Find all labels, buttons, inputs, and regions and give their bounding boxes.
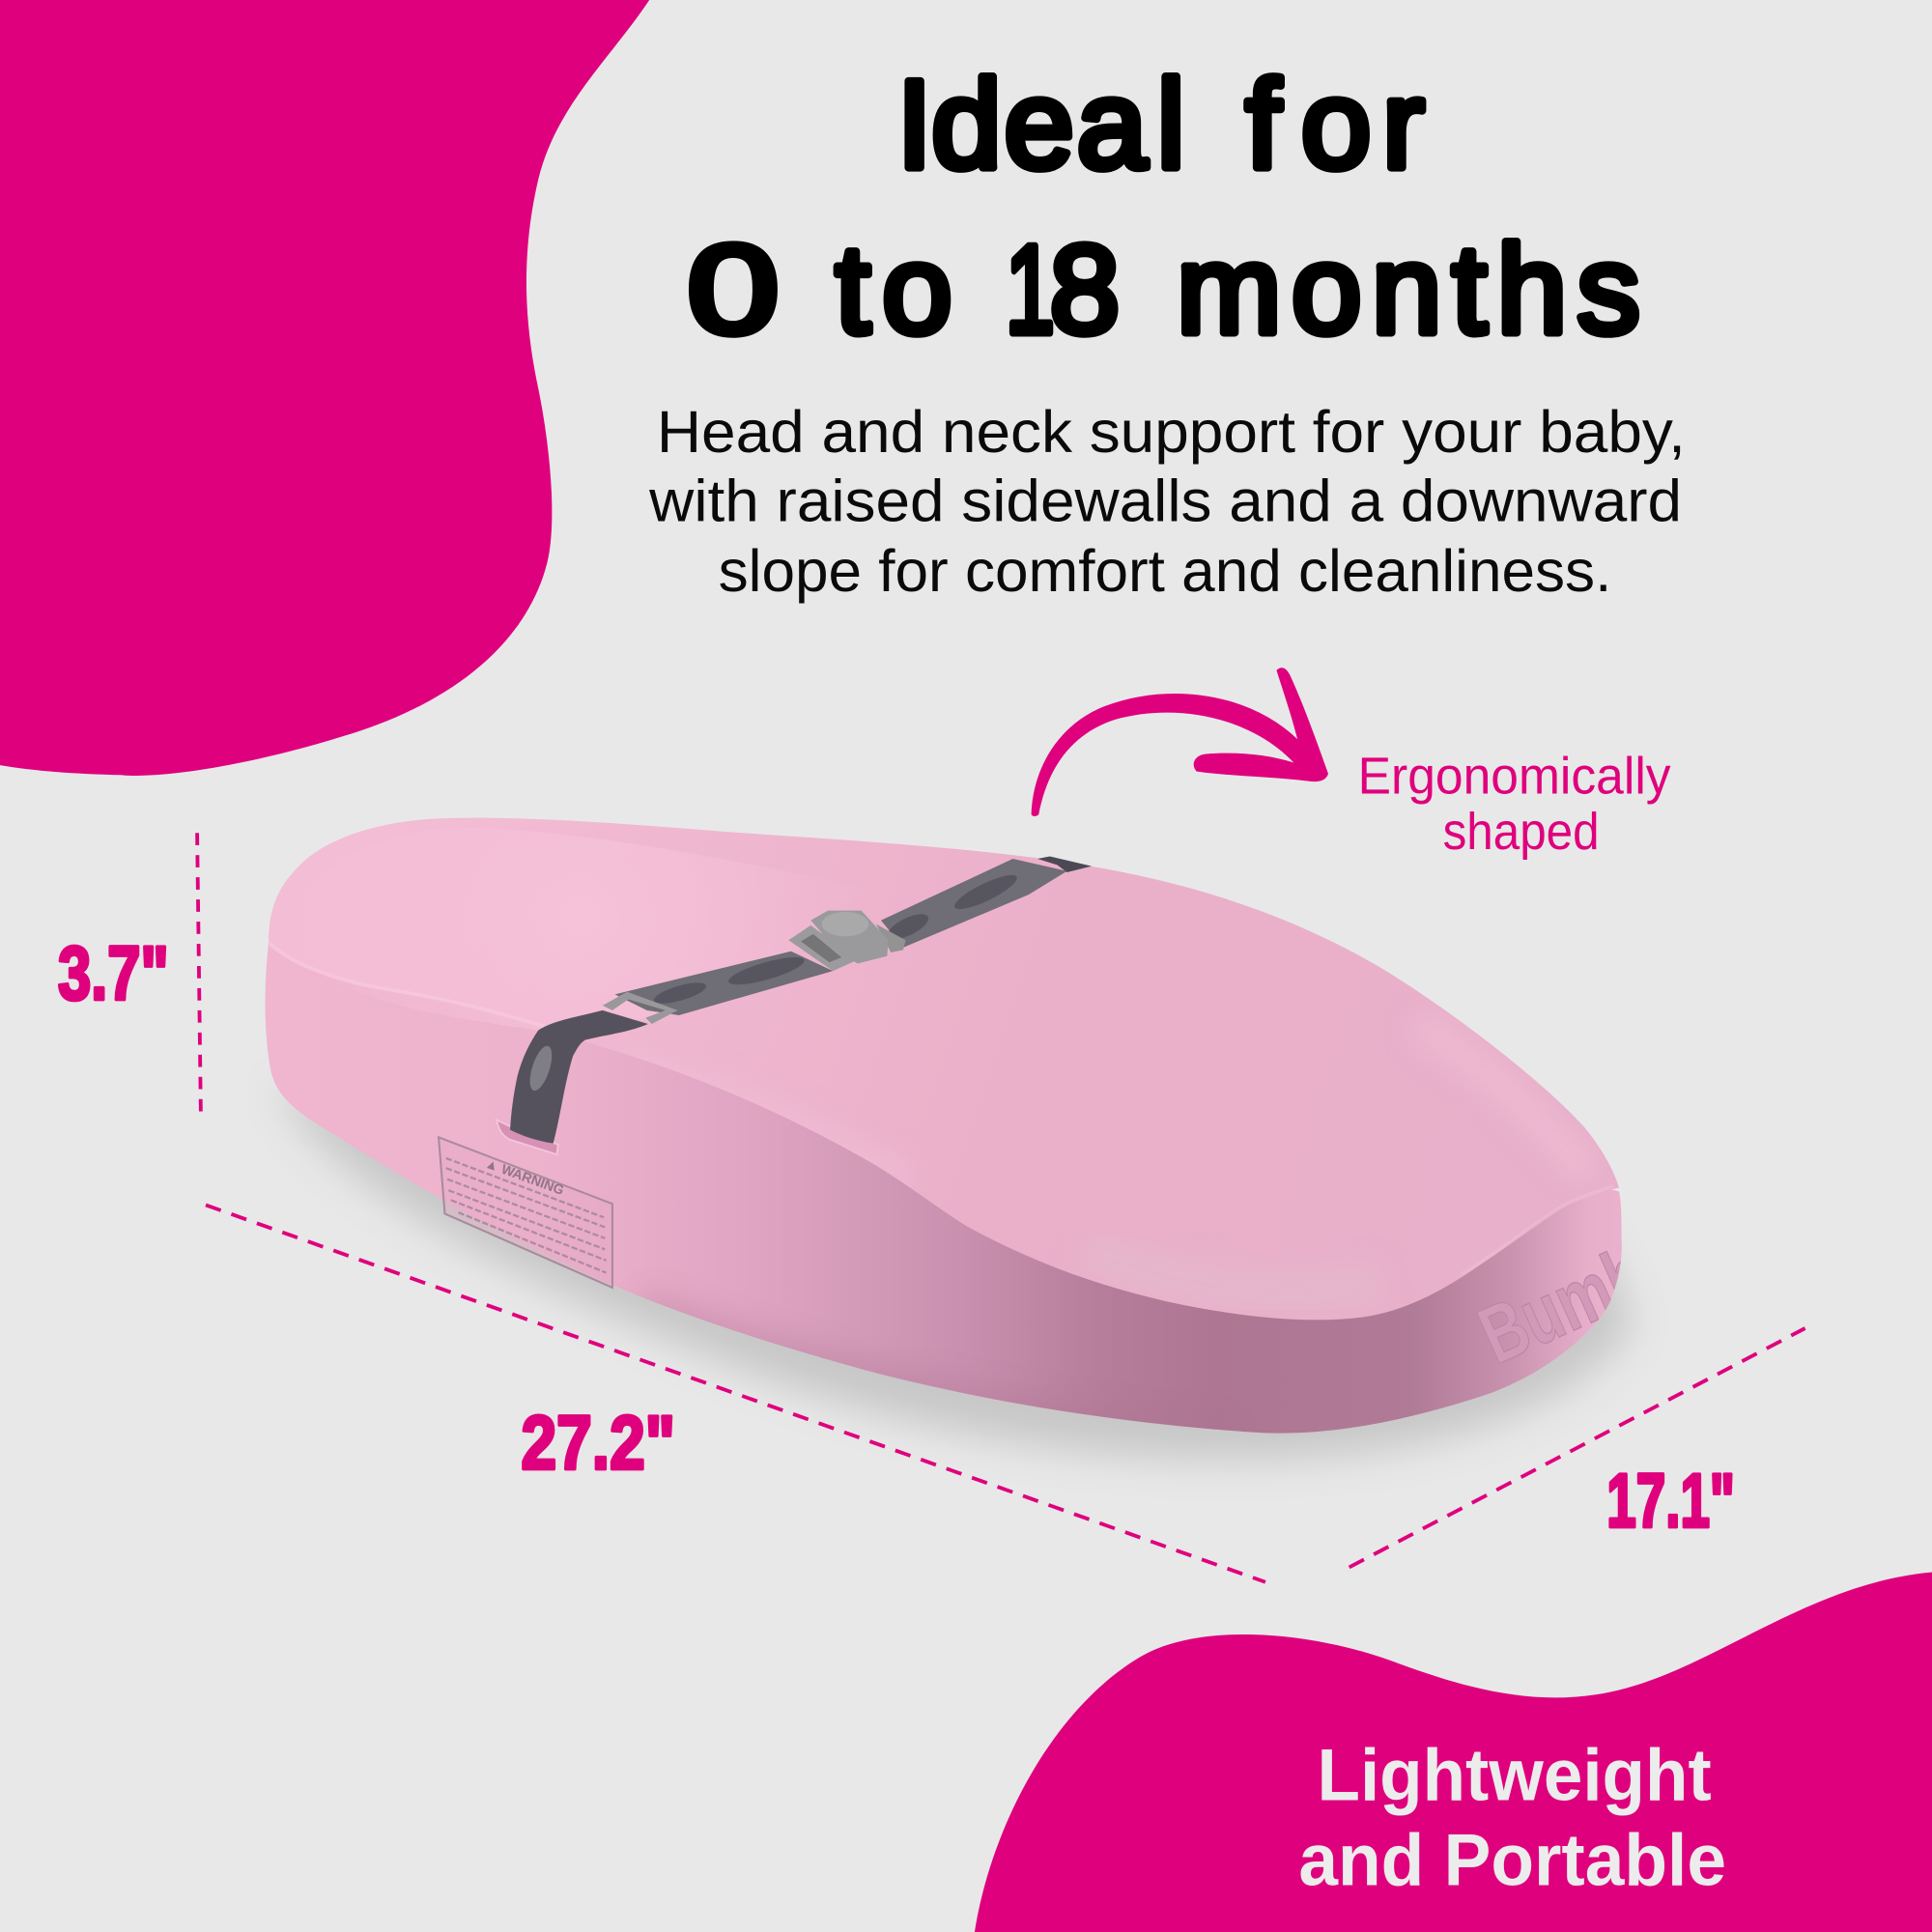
title: 1 bbox=[1006, 218, 1055, 359]
title: 8 bbox=[1050, 218, 1120, 359]
description text: Head and neck support for your baby, bbox=[657, 399, 1686, 465]
title: Ideal bbox=[897, 53, 1185, 194]
product: changing pad bbox=[266, 818, 1694, 1460]
title: 0 bbox=[688, 218, 779, 359]
strap adjuster clip bbox=[603, 992, 678, 1024]
label: ergonomically shaped: shaped bbox=[1443, 804, 1600, 861]
dimension: length: 27.2" bbox=[522, 1399, 675, 1485]
strap logo marks bbox=[652, 869, 1020, 1008]
blob: top left bbox=[0, 0, 649, 776]
label: ergonomically shaped: Ergonomically bbox=[1358, 748, 1671, 805]
dimension: height: 3.7" bbox=[58, 929, 169, 1015]
blob: bottom right bbox=[975, 1573, 1932, 1932]
title: for bbox=[1246, 53, 1424, 194]
buckle bbox=[788, 911, 906, 971]
strap slot bbox=[497, 1120, 558, 1154]
description text bbox=[648, 399, 1686, 604]
title: months bbox=[1177, 218, 1640, 359]
dimension: length bbox=[206, 1205, 1265, 1582]
title: to bbox=[836, 218, 952, 359]
strap: logo on front bbox=[526, 1043, 556, 1094]
strap: middle section bbox=[614, 952, 833, 1015]
pad top surface bbox=[269, 818, 1619, 1320]
side shade along bottom edge bbox=[645, 1293, 973, 1395]
inner bowl bbox=[281, 828, 863, 1033]
rim edge highlight bbox=[269, 943, 545, 1026]
pad side wall bbox=[266, 943, 1622, 1434]
description text: with raised sidewalls and a downward bbox=[648, 469, 1682, 534]
strap: front section bbox=[510, 1010, 648, 1144]
callout: lightweight and portable bbox=[1298, 1735, 1726, 1902]
strap: upper section bbox=[881, 859, 1067, 948]
embossed brand text: Bumbo bbox=[1466, 1213, 1694, 1381]
description text: slope for comfort and cleanliness. bbox=[719, 538, 1611, 604]
strap: far end bbox=[1037, 856, 1092, 872]
dimension: width bbox=[1350, 1328, 1805, 1567]
callout: lightweight and portable: Lightweight bbox=[1318, 1735, 1712, 1817]
title bbox=[688, 53, 1640, 359]
top surface soft highlights bbox=[616, 1023, 1589, 1293]
warning label: ▲ WARNING bbox=[483, 1155, 566, 1198]
pad shadow bbox=[277, 1084, 1633, 1460]
dimension: height bbox=[58, 833, 201, 1115]
arrow: curved brush arrow bbox=[1032, 668, 1328, 816]
label: ergonomically shaped bbox=[1358, 748, 1671, 861]
warning label bbox=[439, 1137, 612, 1288]
lip ridge highlight bbox=[1462, 1185, 1614, 1274]
dimension: width: 17.1" bbox=[1606, 1457, 1735, 1543]
callout: lightweight and portable: and Portable bbox=[1298, 1820, 1726, 1902]
